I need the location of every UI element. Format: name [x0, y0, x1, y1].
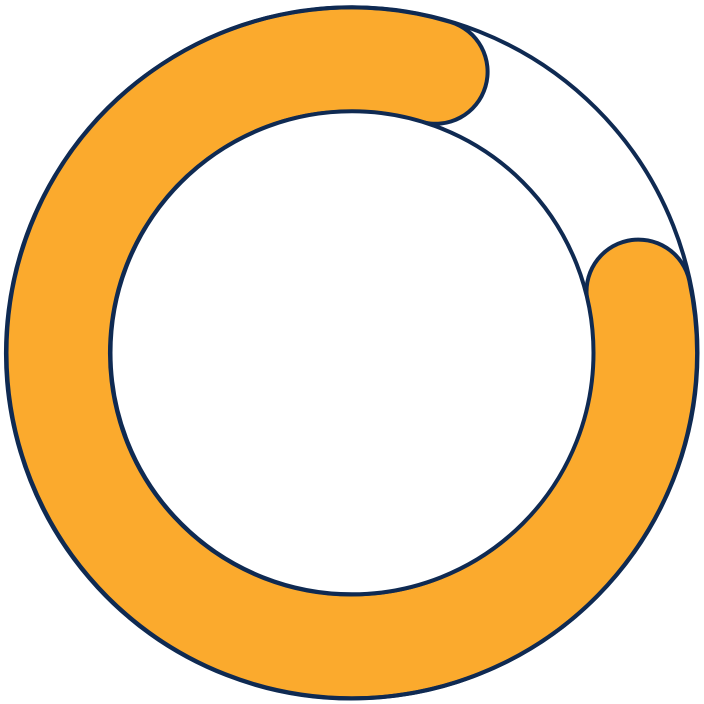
progress arc fill [58, 59, 645, 646]
progress arc outline [58, 59, 645, 646]
inner ring outline [110, 111, 594, 594]
